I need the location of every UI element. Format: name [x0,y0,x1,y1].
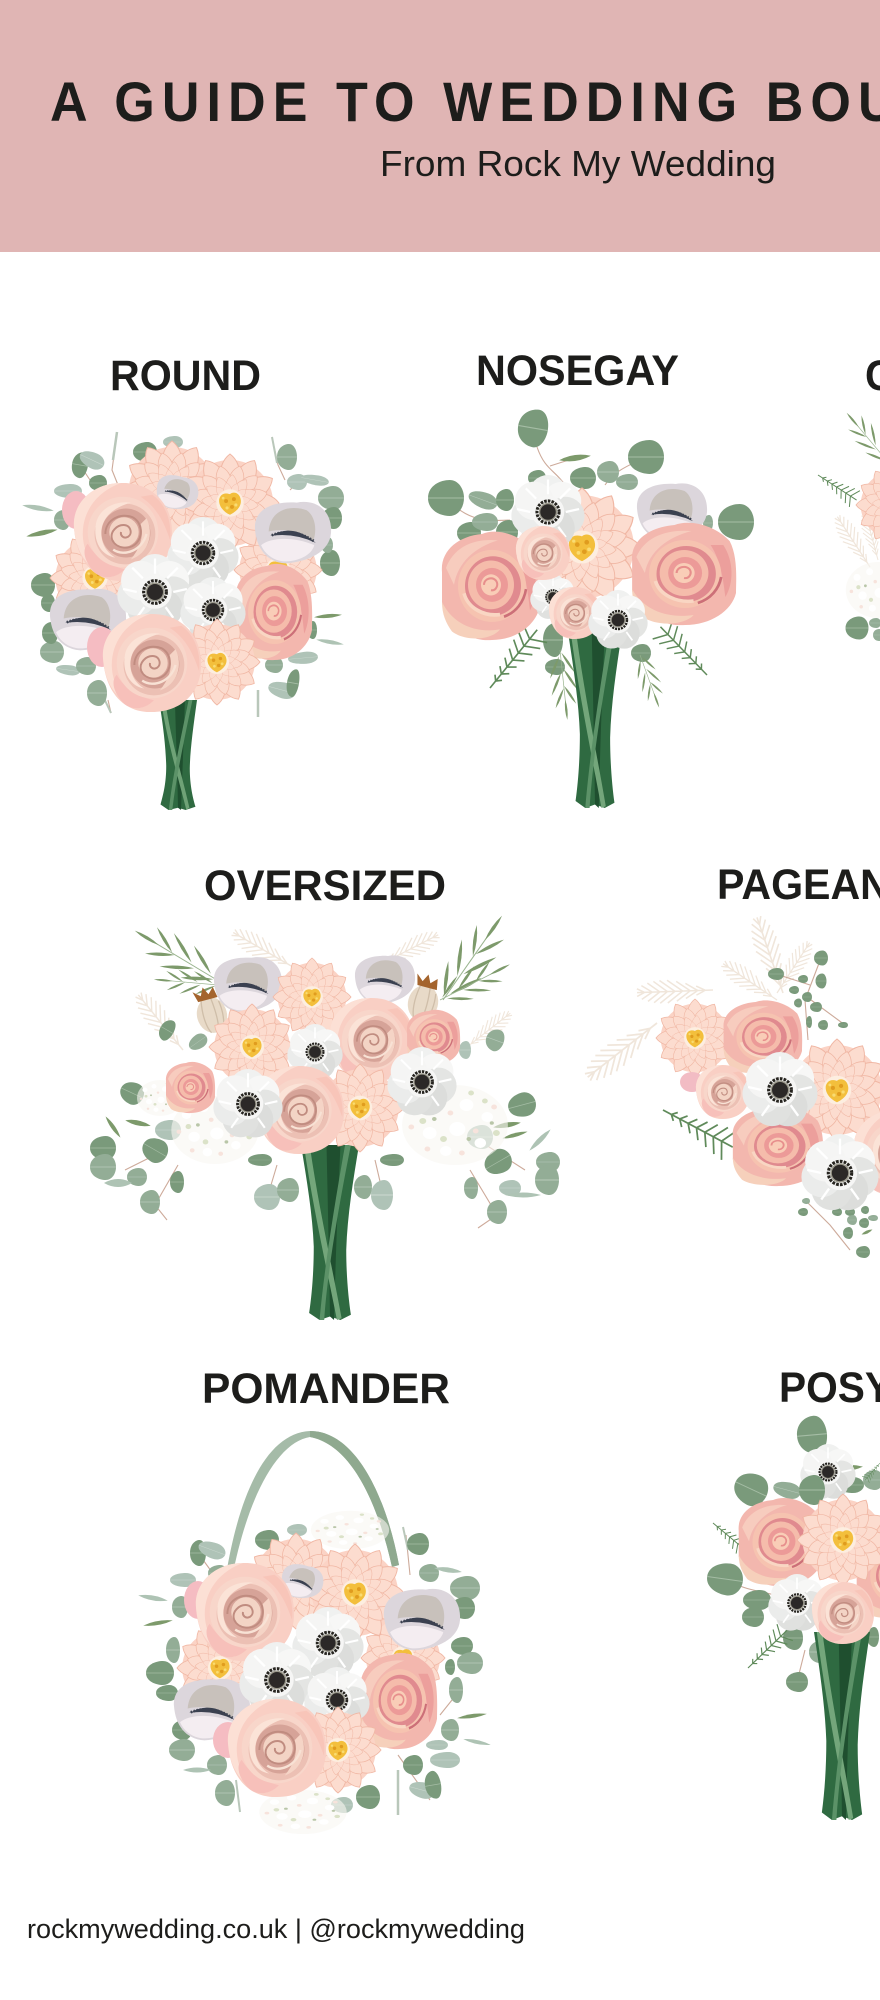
anemone grey [50,589,126,650]
anemone grey [214,957,282,1012]
anemone behind leaves [797,1443,859,1504]
rose coral [733,1106,823,1186]
eucalyptus [768,950,878,1258]
pampas [580,913,817,1088]
anemone [235,1641,319,1723]
petal [87,627,117,667]
dahlia [656,999,734,1077]
anemone [383,1046,461,1121]
bouquet: posy (cropped) [705,1415,880,1820]
petal [213,1722,243,1758]
anemone [738,1051,822,1133]
eucalyptus [90,1017,560,1228]
anemone grey [637,483,707,540]
anemone [507,474,589,554]
anemone [163,516,243,594]
rose coral [632,523,736,625]
dahlia [209,1004,295,1090]
rose small [549,587,601,639]
rose coral [360,1653,437,1749]
gypsophila right [402,1085,508,1165]
green sprigs [125,904,519,1014]
dahlia [316,1064,404,1152]
foliage [22,432,344,717]
dahlia [273,958,351,1036]
anemone [284,1023,346,1084]
sprigs and fern [813,404,880,572]
dahlia [797,1494,880,1586]
dahlia [181,454,279,552]
subtitle: From Rock My Wedding [380,143,776,184]
petal [184,1581,212,1619]
anemone [209,1068,287,1143]
rose coral [235,564,312,660]
dahlia lower [174,619,260,705]
seed pod [404,971,445,1024]
gypsophila [846,562,880,618]
rose coral cropped [857,1533,880,1619]
stems [301,1145,359,1320]
rose [228,1699,326,1797]
anemone [585,589,651,654]
dahlia top [248,1533,344,1629]
rose coral [723,1000,802,1074]
anemone [765,1573,829,1636]
pampas [130,924,515,1057]
header band [0,0,880,252]
rose pale cropped [854,1110,880,1196]
rose small [696,1065,750,1119]
anemone grey [355,955,415,1004]
footer credit: rockmywedding.co.uk | @rockmywedding [27,1914,525,1944]
rose small [516,526,570,580]
leaf over anemone [799,1475,825,1505]
rose [330,998,414,1082]
gypsophila top [311,1511,389,1549]
anemone [301,1666,374,1737]
gypsophila bottom [259,1790,347,1834]
dahlia back right [234,526,322,614]
heading: round: ROUND [110,352,261,400]
bouquet: nosegay [428,407,754,808]
rose coral small [407,1010,460,1065]
heading: oversized: OVERSIZED [204,862,446,910]
anemone grey [255,502,331,563]
bouquet: cascade (cropped) [813,404,880,641]
anemone [177,576,250,647]
heading: nosegay: NOSEGAY [476,347,679,395]
rose coral [442,532,540,640]
dahlia lower [295,1707,381,1793]
dahlia back right [361,1616,445,1700]
anemone [113,553,197,635]
ribbon handle [226,1431,399,1578]
dahlia [306,1544,404,1642]
anemone grey [384,1589,460,1650]
gypsophila left [171,1096,259,1164]
bouquet: round [22,432,344,810]
gypsophila left [137,1080,183,1116]
dahlia [523,488,641,606]
stems [568,632,622,808]
foliage [705,1415,880,1692]
dahlia [786,1039,880,1141]
rose [812,1582,874,1644]
rose [74,483,172,581]
rose bud [180,575,204,599]
foliage [428,407,754,721]
rose [103,614,201,712]
heading: pomander: POMANDER [202,1365,450,1413]
anemone [797,1133,880,1217]
rose [196,1563,294,1661]
leaves [846,616,880,641]
dahlia [856,466,880,544]
dahlia top [123,441,221,539]
rose [256,1066,344,1154]
anemone small [277,1560,327,1604]
anemone small [528,573,578,623]
bouquet: pomander [138,1431,491,1834]
rose coral [739,1498,823,1586]
stems [159,700,197,810]
petal [680,1072,704,1092]
rose coral small [166,1062,215,1113]
petal [62,491,90,529]
seed pod [190,983,231,1036]
bouquet: pageant (cropped) [580,913,880,1258]
dahlia left [50,533,140,623]
stems [814,1632,870,1820]
anemone small [152,471,202,515]
fern [655,1095,741,1162]
anemone grey [174,1679,250,1740]
foliage [138,1524,491,1815]
bouquet: oversized [90,904,560,1320]
dahlia left [177,1625,263,1711]
anemone [288,1606,368,1684]
